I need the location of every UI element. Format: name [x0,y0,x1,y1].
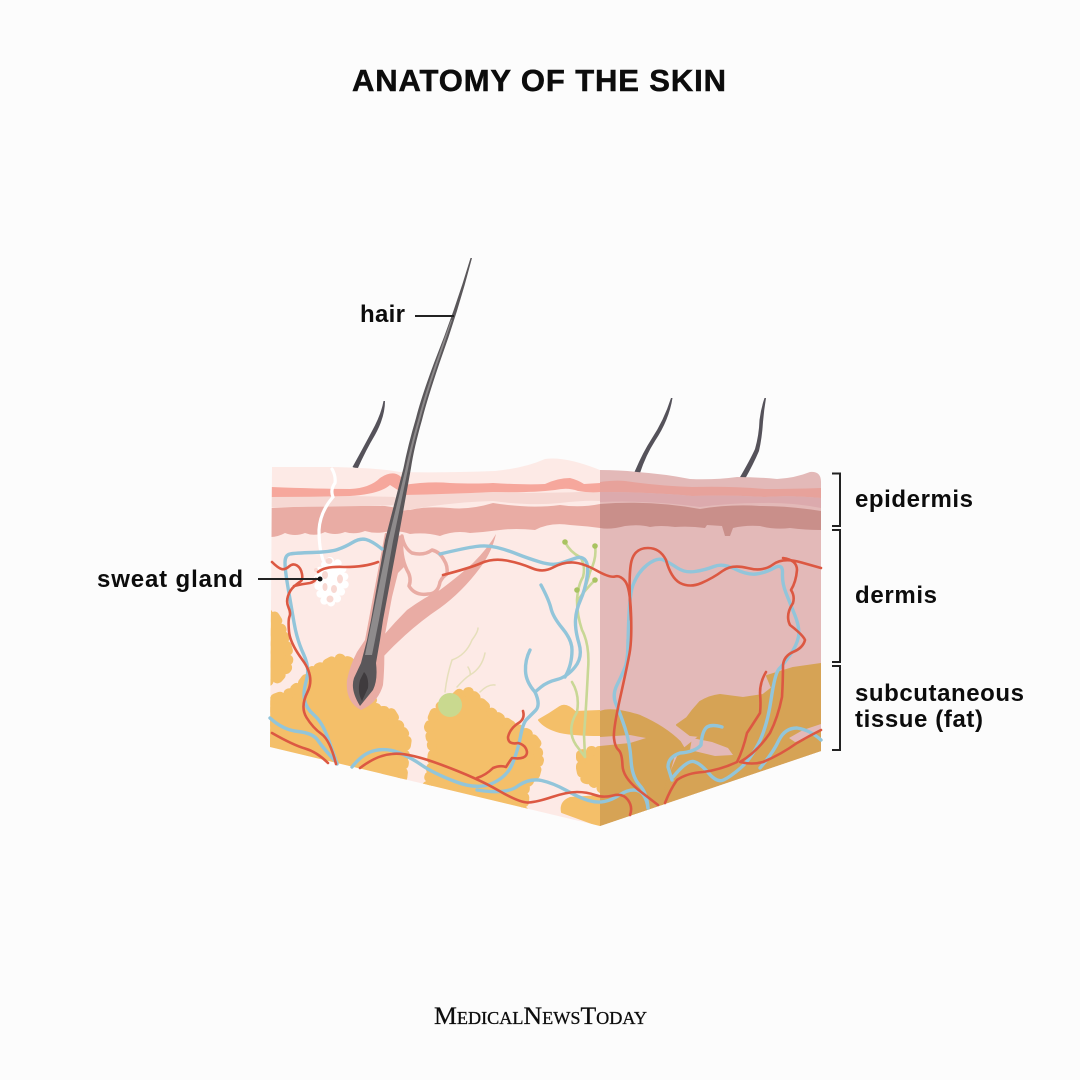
right fat deposits [600,664,821,826]
small hair: right [740,398,766,479]
subcutaneous text: subcutaneous [855,680,1024,707]
blue hook vessel [525,650,535,692]
leader dot [318,576,322,582]
main hair shaft [353,258,472,706]
label: dermis with bracket [832,530,937,662]
label: epidermis with bracket [832,474,973,526]
red branch in right fat [665,672,766,803]
right pink band [600,481,821,498]
left epidermis layers [270,473,600,537]
hair follicle sheath [347,533,406,710]
left face of skin block [270,458,600,826]
pale gap in fat 1 [600,735,646,746]
blue right face vessel 3 [668,726,722,780]
arrector pili muscle [378,534,496,658]
sweat gland coil [318,561,345,603]
dermis text: dermis [855,582,937,609]
hair outer [353,258,472,706]
hair text: hair [360,301,405,328]
blue branch to fat [352,692,538,786]
right fat mass 2 [662,664,821,806]
fat lobule 1 [266,614,289,682]
right fat mass 1 [600,710,686,826]
pale gap in fat 3 [789,724,821,742]
dark lower epidermis band [270,503,600,537]
blue dermis vessel [440,546,588,692]
epidermis bracket [832,474,840,526]
pale gap on left fat [587,737,600,746]
right epidermis layers [600,481,821,536]
blue right face vessel 1 [628,559,799,781]
fat lobule 6 [562,796,600,826]
blue right face vessel 4 [760,728,821,768]
red connector to gland [294,579,316,586]
fat lobule 5 [581,751,604,790]
red dermis vessel [443,560,658,805]
label: hair [360,301,454,328]
nerve ending dots [562,539,598,593]
sweat gland leader line [258,578,320,580]
left fat deposits [266,614,604,826]
dermis bracket [832,530,840,662]
right light band [600,492,821,508]
small hair: middle [634,398,672,473]
hair highlight [365,320,452,655]
blood vessels: red [272,548,821,815]
sweat gland [314,469,345,603]
fat lobule 3 [425,692,539,820]
right dark band [600,503,821,536]
sebaceous gland [402,536,447,594]
coil lumens [314,558,343,602]
green cell [438,693,462,717]
blue upper left vessel [285,539,382,764]
logo: Medical News Today: MedicalNewsToday [434,1001,647,1030]
label: subcutaneous tissue with bracket [832,666,1024,750]
red small gland vessel [318,562,378,572]
pink upper epidermis band [270,473,600,497]
red pointer squiggle [272,562,336,764]
subcutaneous bracket [832,666,840,750]
small hair: left [352,401,385,469]
red bottom vessel [360,754,631,815]
blue right face vessel 2 [614,640,648,808]
skin block diagram [266,258,821,826]
fat cell (green) with nerve strands [438,628,495,717]
right face of skin block [600,470,821,826]
hair leader line [415,315,454,317]
red right edge vessel [740,558,821,764]
red lower left vessel [272,733,328,763]
hair bulb core [359,672,368,701]
epidermis text: epidermis [855,486,973,513]
fat lobule 4 [539,706,600,735]
pale gap in fat 2 [690,738,733,756]
red right face upper vessel [630,548,821,620]
blue bottom vessel [477,780,648,808]
nerve fibres with endings (green) [562,539,598,757]
tissue text: tissue (fat) [855,706,983,733]
title: ANATOMY OF THE SKIN [352,63,726,98]
sweat duct [319,469,335,560]
label: sweat gland [97,566,322,593]
nerve strands [445,628,495,692]
blood and lymph vessels: blue [270,539,821,808]
red branch in left fat [477,711,527,778]
nerve paths [565,542,595,757]
blue lower left vessel [270,718,337,763]
light middle epidermis band [270,491,600,511]
fat lobule 2 [266,658,407,790]
blue short dermis vessel [541,585,572,677]
sweat gland text: sweat gland [97,566,243,593]
